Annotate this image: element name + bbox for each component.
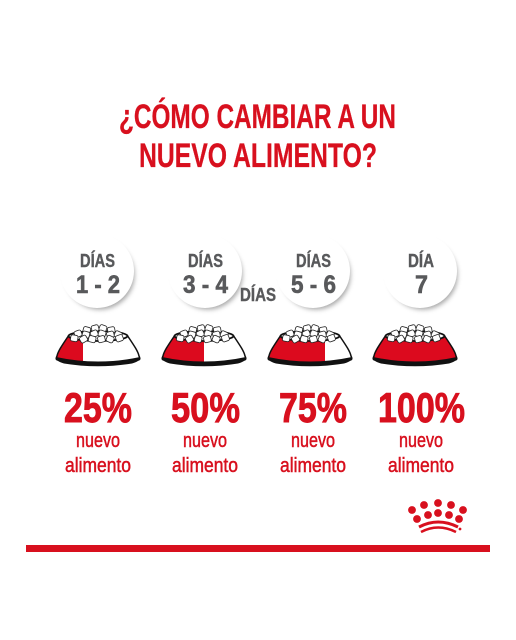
- circle: day 7: 7: [415, 271, 428, 299]
- circle: days 1-2: DÍAS: [80, 250, 115, 271]
- stat: 100%: 100%: [378, 384, 465, 431]
- bowl: 100% red: [372, 324, 458, 366]
- bowl: 25% red: [55, 324, 141, 366]
- circle: days 3-4: 3 - 4: [183, 271, 228, 299]
- stat: 25%: [64, 384, 132, 477]
- title: [119, 98, 396, 175]
- stat: 50%: nuevo: [183, 430, 227, 452]
- bowl: 50% red: [161, 324, 246, 366]
- stat: 100%: alimento: [388, 455, 454, 477]
- circle: days 3-4: DÍAS: [188, 250, 223, 271]
- icon: royal crown logo: [408, 499, 467, 532]
- circle: day 7: [383, 234, 458, 310]
- stat: 75%: alimento: [280, 455, 346, 477]
- title: ¿CÓMO CAMBIAR A UN: [119, 98, 396, 136]
- bowl: 75% red: [267, 324, 352, 366]
- circle: days 5-6: DÍAS: [296, 250, 331, 271]
- circle: days 3-4: [168, 234, 242, 310]
- stat: 75%: [279, 384, 347, 477]
- stat: 75%: nuevo: [291, 430, 335, 452]
- circle: day 7: DÍA: [408, 250, 434, 271]
- stray label: días: DÍAS: [240, 284, 276, 305]
- circle: days 1-2: 1 - 2: [76, 271, 120, 299]
- circle: days 1-2: [60, 234, 134, 310]
- stat: 25%: alimento: [65, 455, 131, 477]
- stat: 100%: [378, 384, 465, 477]
- stat: 50%: [171, 384, 240, 477]
- title: NUEVO ALIMENTO?: [139, 137, 377, 175]
- stat: 25%: nuevo: [76, 430, 120, 452]
- stat: 25%: 25%: [64, 384, 132, 431]
- stat: 50%: 50%: [171, 384, 240, 431]
- stat: 75%: 75%: [279, 384, 347, 431]
- circle: days 5-6: 5 - 6: [291, 271, 336, 299]
- footer bar: [26, 545, 490, 552]
- stat: 100%: nuevo: [399, 430, 443, 452]
- stat: 50%: alimento: [172, 455, 238, 477]
- circle: days 5-6: [276, 234, 350, 310]
